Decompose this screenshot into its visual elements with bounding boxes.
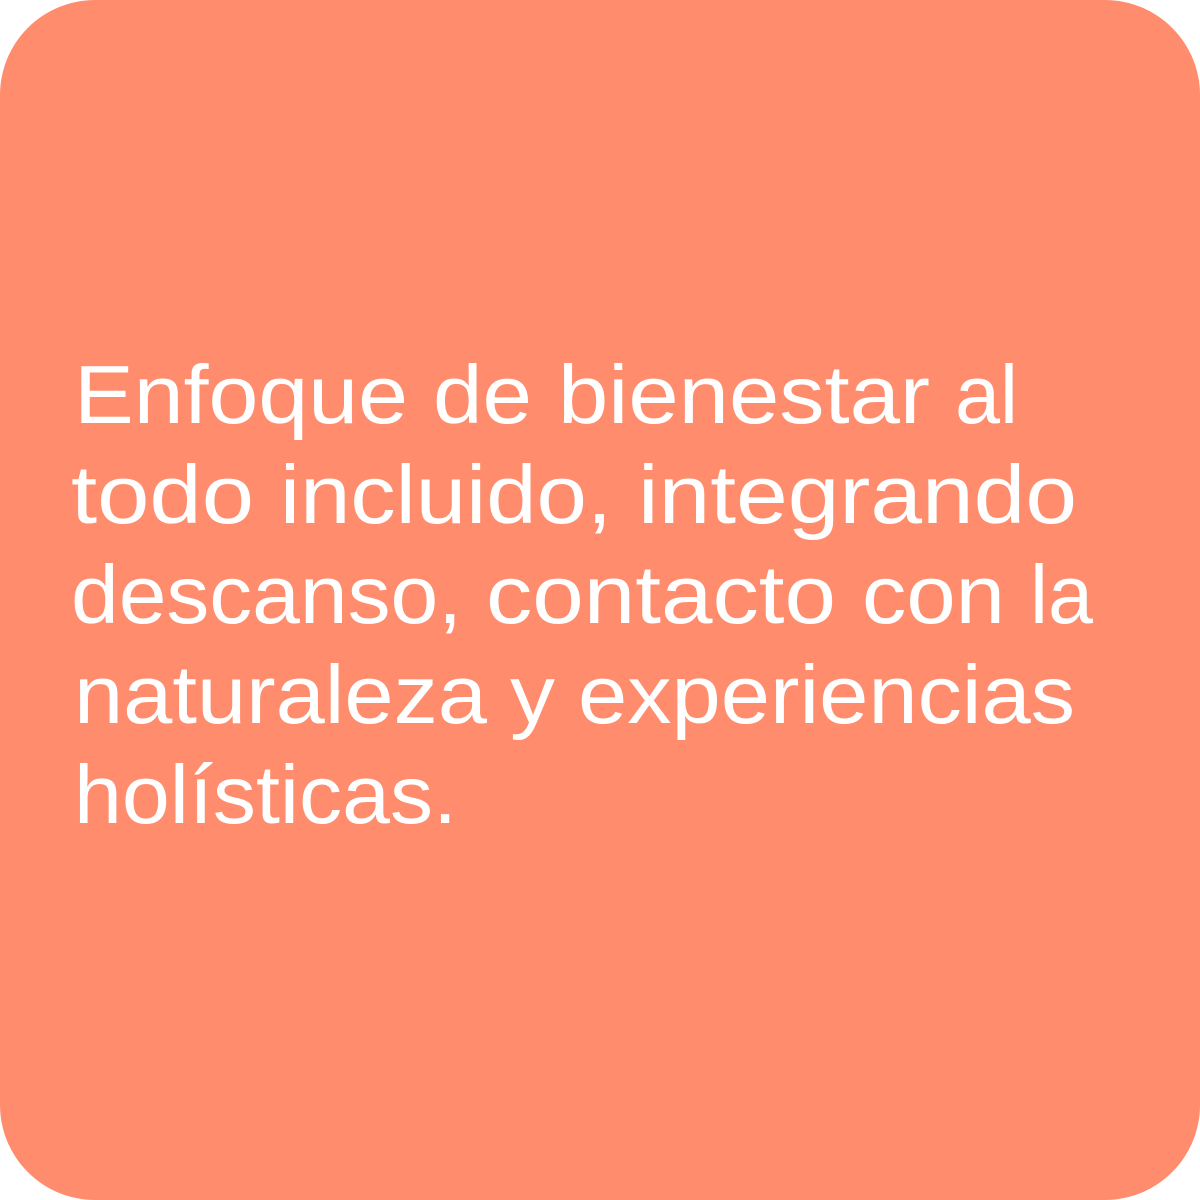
text block: wellness approach description: incluido, <box>280 448 612 541</box>
text block: wellness approach description: experiencias <box>578 648 1075 741</box>
text block: wellness approach description: de <box>433 348 532 441</box>
text block: wellness approach description: integrando <box>638 448 1077 541</box>
text block: wellness approach description: Enfoque <box>74 348 408 441</box>
text block: wellness approach description: naturaleza <box>74 648 488 741</box>
text block: wellness approach description: al <box>955 348 1018 441</box>
text block: wellness approach description: la <box>1030 548 1094 641</box>
text block: wellness approach description: descanso, <box>71 548 462 641</box>
text block: wellness approach description: todo <box>71 448 254 541</box>
text block: wellness approach description: bienestar <box>558 348 930 441</box>
text block: wellness approach description: contacto <box>486 548 836 641</box>
text block: wellness approach description: con <box>862 548 1005 641</box>
text block: wellness approach description: y <box>510 648 556 741</box>
text block: wellness approach description <box>71 348 1094 841</box>
text block: wellness approach description: holísticas. <box>74 748 457 841</box>
